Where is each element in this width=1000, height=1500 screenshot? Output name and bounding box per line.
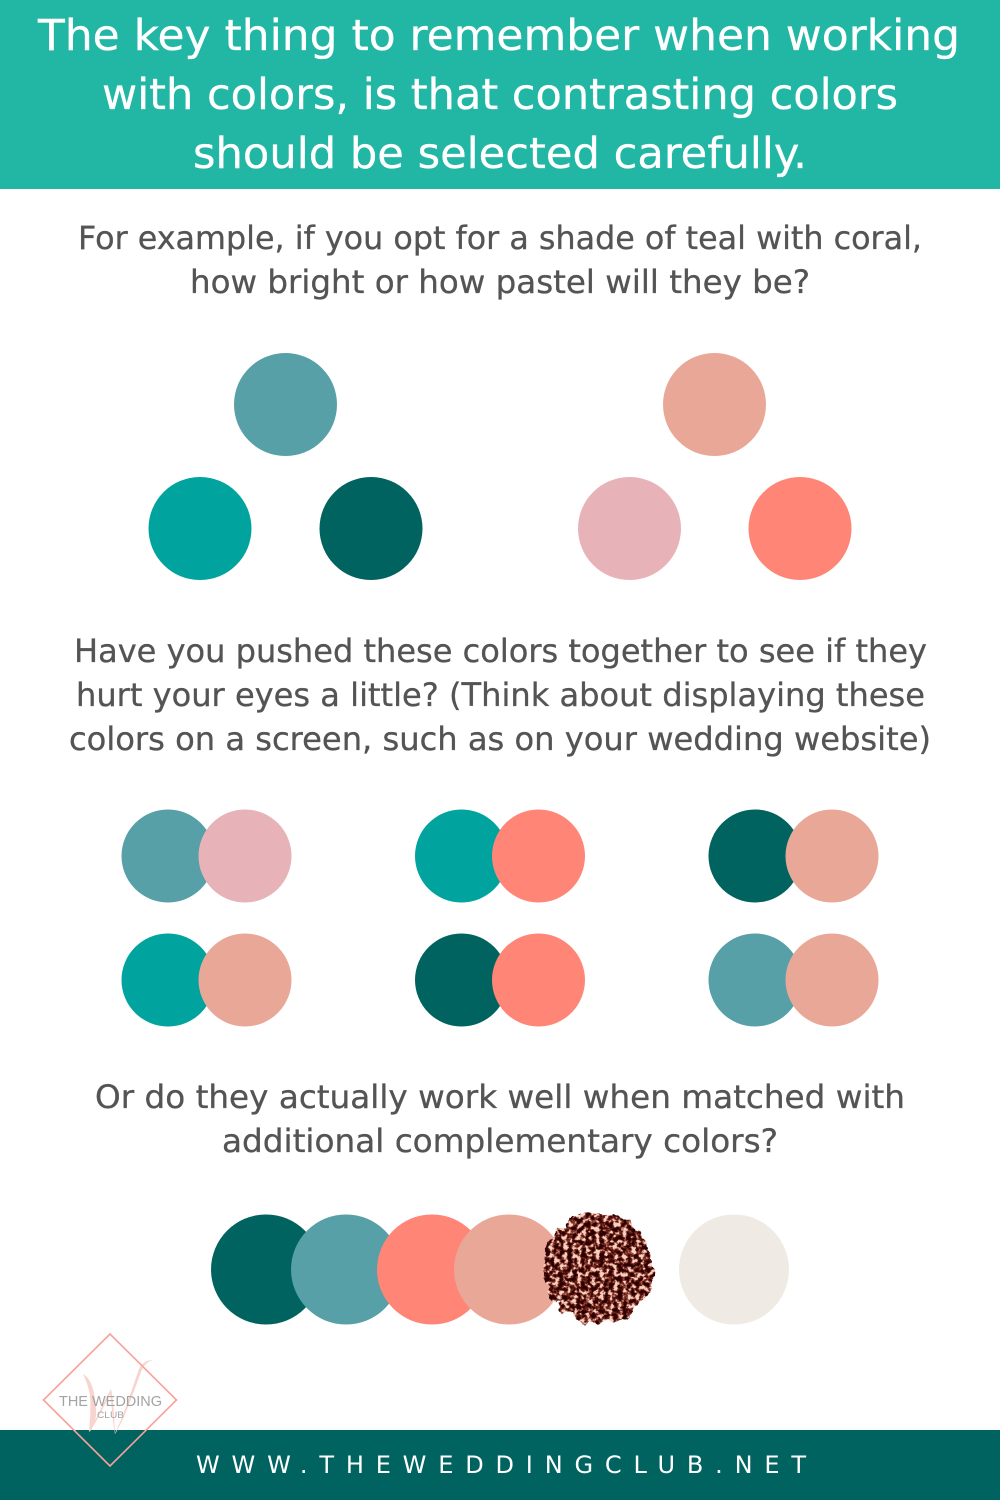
intro text — [78, 219, 922, 301]
logo club: CLUB — [97, 1410, 124, 1421]
logo script W — [83, 1360, 153, 1434]
teal swatch triangle — [148, 353, 422, 580]
logo diamond — [44, 1334, 176, 1466]
header banner — [0, 0, 1000, 189]
header heading: The key thing to remember when working — [37, 11, 960, 61]
paired swatches grid — [122, 810, 878, 1026]
footer bar — [0, 1430, 1000, 1500]
pair: dark teal and coral — [415, 934, 585, 1026]
second question text: hurt your eyes a little? (Think about displaying these — [76, 676, 925, 714]
third question text: additional complementary colors? — [222, 1122, 778, 1160]
header heading: should be selected carefully. — [193, 129, 807, 179]
second question text: colors on a screen, such as on your wedding website) — [69, 720, 931, 758]
coral swatch triangle — [578, 353, 852, 580]
third question text — [95, 1078, 905, 1160]
pair: muted teal and pink — [122, 810, 292, 902]
pair: bright teal and coral — [415, 810, 585, 902]
logo wordmark: THE WEDDING — [59, 1394, 162, 1410]
footer url: WWW.THEWEDDINGCLUB.NET — [196, 1451, 806, 1479]
complementary palette row — [211, 1213, 789, 1324]
second question text — [69, 632, 931, 758]
pair: bright teal and peach — [122, 934, 292, 1026]
pair: dark teal and peach — [708, 810, 878, 902]
header heading — [37, 11, 960, 179]
third question text: Or do they actually work well when matched with — [95, 1078, 905, 1116]
second question text: Have you pushed these colors together to see if they — [74, 632, 927, 670]
logo: The Wedding Club — [44, 1334, 176, 1466]
intro text: how bright or how pastel will they be? — [190, 263, 810, 301]
glitter swatch — [543, 1213, 653, 1323]
intro text: For example, if you opt for a shade of teal with coral, — [78, 219, 922, 257]
pair: muted teal and peach — [708, 934, 878, 1026]
header heading: with colors, is that contrasting colors — [102, 70, 898, 120]
cream swatch — [679, 1214, 789, 1324]
